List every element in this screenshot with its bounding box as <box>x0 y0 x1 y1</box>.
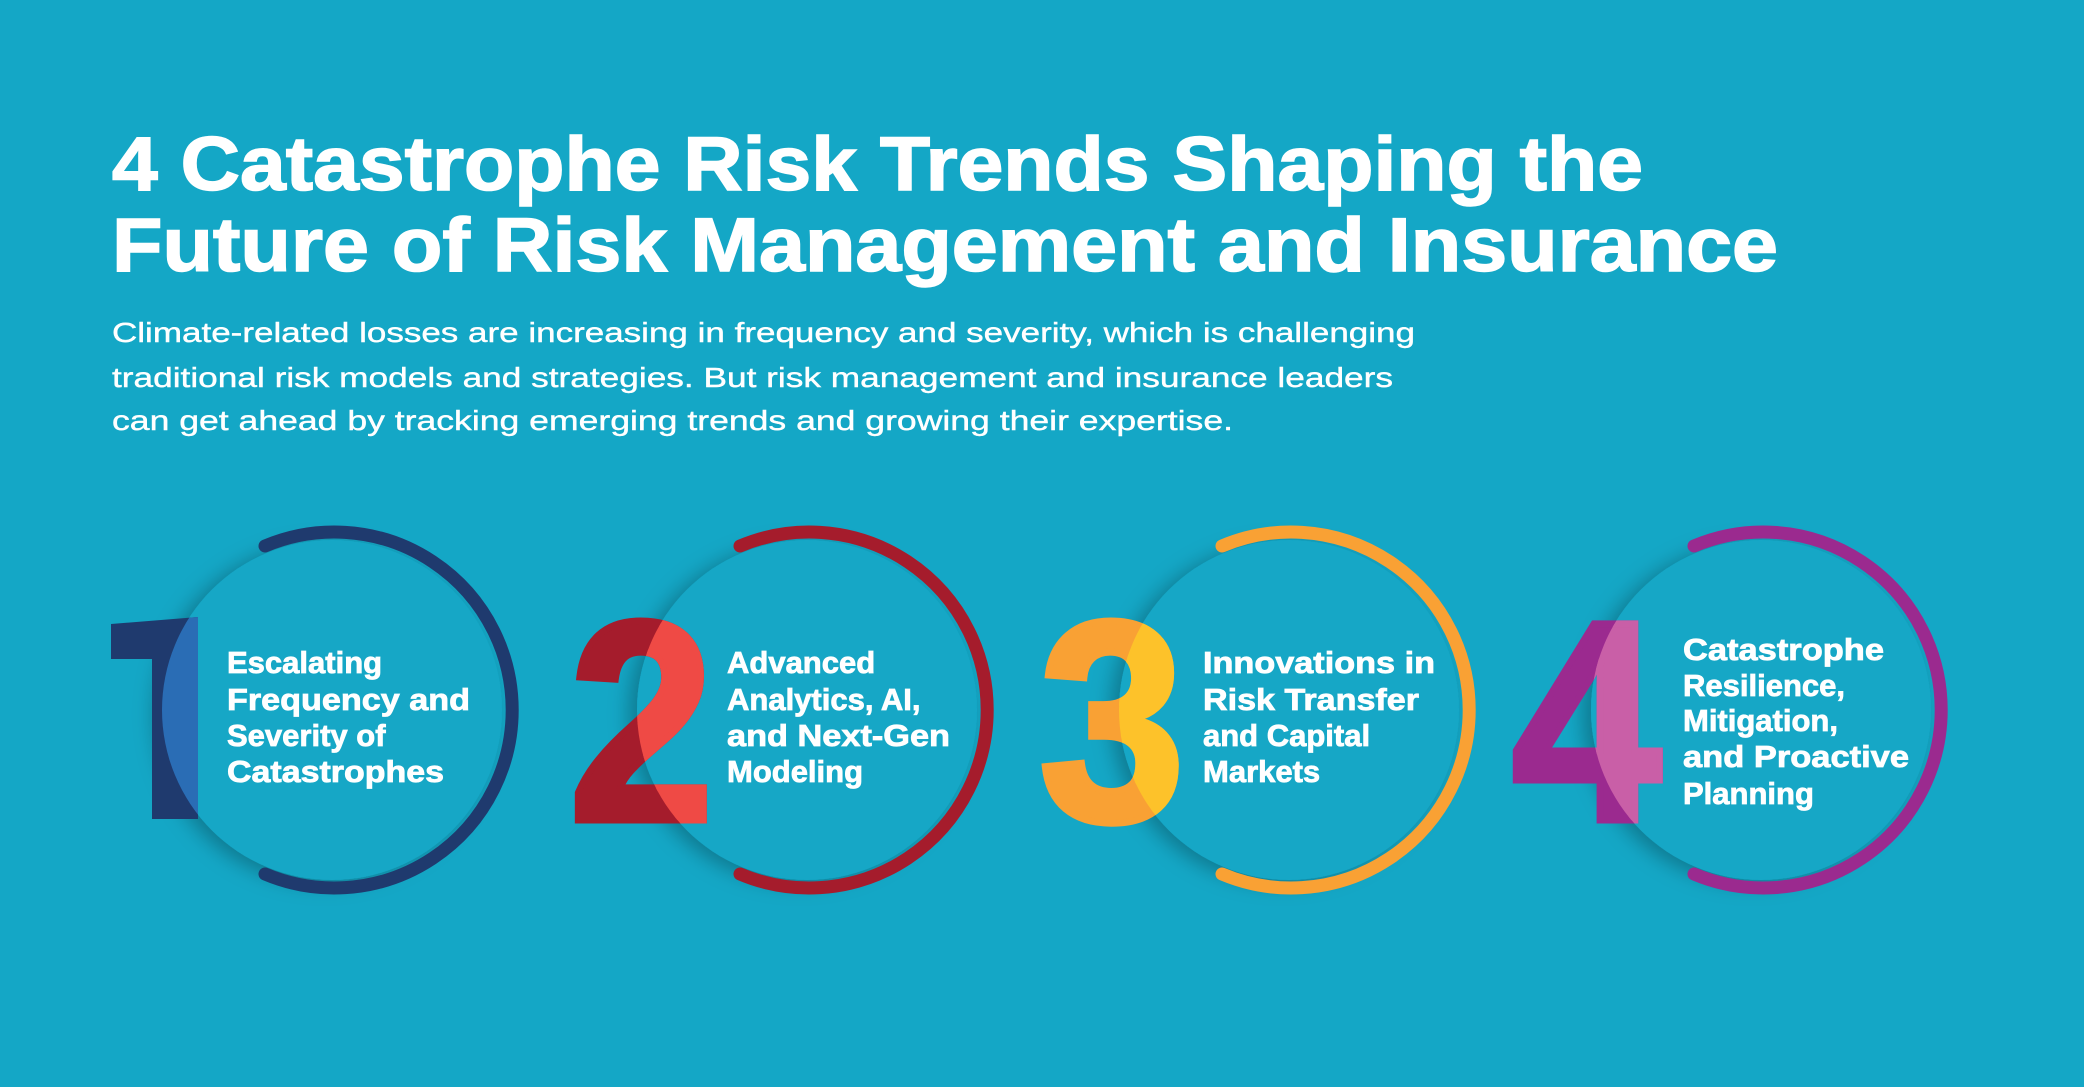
text 1: Catastrophes <box>227 754 444 789</box>
number 3: 3 <box>1039 563 1185 881</box>
number 4: 4 <box>1512 563 1663 881</box>
title: 4 Catastrophe Risk Trends Shaping the <box>112 122 1643 207</box>
ring 4 <box>1694 532 1941 888</box>
ring 2 <box>740 532 987 888</box>
text 1: Frequency and <box>227 682 470 717</box>
text 3: Markets <box>1203 754 1320 789</box>
trend 4 <box>1512 532 1941 888</box>
text 4: Mitigation, <box>1683 703 1838 738</box>
number 4 <box>1512 620 1663 824</box>
number 2 <box>574 618 707 824</box>
text 4: Planning <box>1683 776 1814 811</box>
title <box>112 122 1778 288</box>
number 4: 4 <box>1512 563 1663 881</box>
text 1: Severity of <box>227 718 386 753</box>
trend 1 <box>111 532 512 888</box>
text 3 <box>1203 645 1435 789</box>
text 4: Catastrophe <box>1683 632 1884 667</box>
number 2: 2 <box>569 563 714 881</box>
text 3: and Capital <box>1203 718 1370 753</box>
text 3: Risk Transfer <box>1203 682 1419 717</box>
text 2: and Next-Gen <box>727 718 950 753</box>
intro paragraph <box>112 317 1415 436</box>
title: Future of Risk Management and Insurance <box>112 203 1778 288</box>
text 2: Modeling <box>727 754 863 789</box>
text 3: Innovations in <box>1203 645 1435 680</box>
number 3 <box>1041 618 1179 827</box>
trend 3 <box>1039 532 1469 888</box>
trend 2 <box>569 532 987 888</box>
text 1: Escalating <box>227 645 382 680</box>
ring 1 <box>265 532 512 888</box>
intro paragraph: traditional risk models and strategies. But risk management and insurance leaders <box>112 362 1393 393</box>
text 4: Resilience, <box>1683 668 1845 703</box>
text 4: and Proactive <box>1683 739 1909 774</box>
number 1 <box>111 617 198 819</box>
intro paragraph: Climate-related losses are increasing in frequency and severity, which is challenging <box>112 317 1415 348</box>
ring 3 <box>1222 532 1469 888</box>
number 2: 2 <box>569 563 714 881</box>
text 1 <box>227 645 470 789</box>
number 3: 3 <box>1039 563 1185 881</box>
text 2 <box>727 645 950 789</box>
text 2: Analytics, AI, <box>727 682 921 717</box>
text 4 <box>1683 632 1909 811</box>
text 2: Advanced <box>727 645 875 680</box>
intro paragraph: can get ahead by tracking emerging trends and growing their expertise. <box>112 405 1233 436</box>
